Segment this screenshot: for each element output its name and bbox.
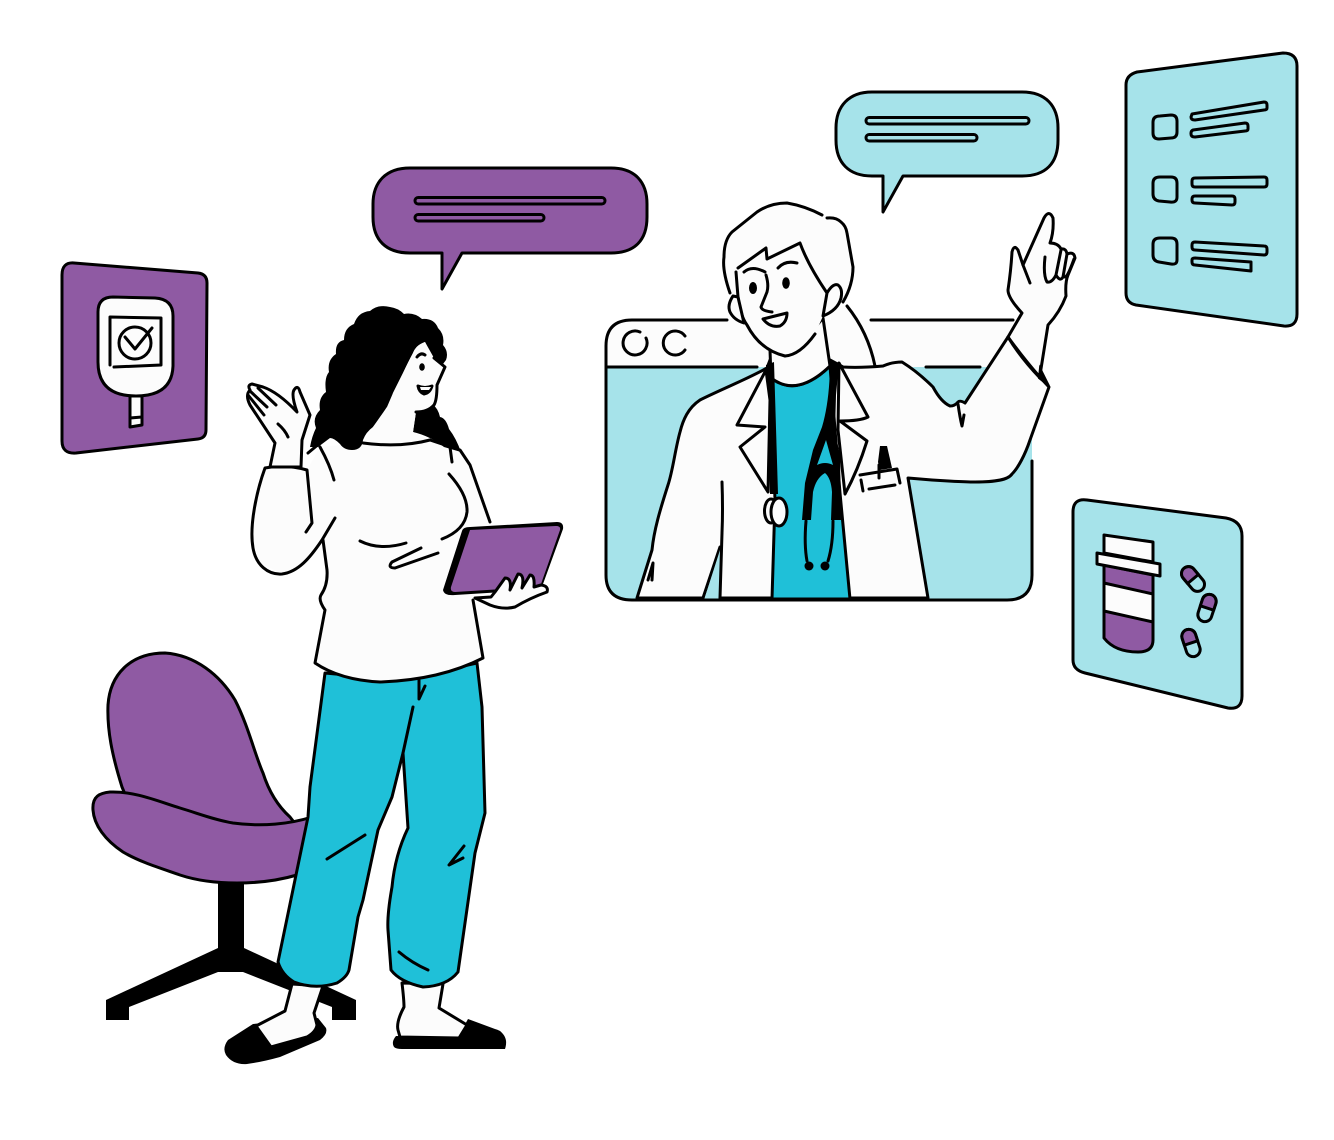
- icon: pill bottle: [1097, 535, 1160, 652]
- hair: [310, 306, 447, 450]
- chair: [93, 653, 356, 1020]
- panel: checklist card: [1126, 53, 1297, 326]
- tablet hand: [475, 574, 547, 608]
- face: [363, 342, 444, 445]
- lapels: [737, 370, 770, 492]
- icon: capsule three: [1180, 628, 1202, 658]
- stethoscope tubes: [764, 360, 841, 570]
- head: [724, 203, 853, 356]
- tablet: [443, 522, 563, 595]
- chair base: [106, 878, 356, 1020]
- doctor: [637, 203, 1075, 599]
- ponytail: [830, 306, 875, 366]
- raised hand: [1008, 214, 1075, 375]
- coat crease lines: [648, 482, 722, 598]
- scrub shirt: [771, 366, 850, 599]
- sweater outline: [308, 440, 490, 682]
- cuff shade: [1039, 368, 1049, 386]
- pants: [278, 663, 485, 987]
- icon: glucose meter: [98, 297, 173, 427]
- shoes: [224, 1018, 506, 1064]
- window buttons: [623, 331, 685, 355]
- speech bubble: doctor: [836, 92, 1058, 212]
- checklist rows: [1153, 102, 1267, 271]
- raised hand: [248, 384, 310, 467]
- panel: glucose meter card: [62, 263, 207, 453]
- icon: capsule two: [1196, 593, 1218, 623]
- chair seat: [93, 792, 312, 883]
- panel: medication card: [1073, 500, 1242, 708]
- sweater seams: [320, 447, 467, 568]
- patient: [224, 306, 563, 1064]
- ponytail edge: [847, 306, 875, 366]
- sweater sleeve: [252, 468, 335, 574]
- sweater: [307, 440, 490, 682]
- speech bubble: patient: [373, 168, 647, 289]
- icon: capsule one: [1179, 564, 1207, 594]
- socks: [256, 984, 323, 1047]
- coat: [637, 337, 1049, 598]
- coat side gap: [705, 550, 720, 597]
- neck: [770, 318, 830, 386]
- video call window: [606, 320, 1032, 600]
- chair back: [108, 653, 300, 830]
- pant creases: [327, 835, 464, 970]
- pocket and pen: [860, 446, 900, 491]
- finger lines: [1023, 250, 1074, 283]
